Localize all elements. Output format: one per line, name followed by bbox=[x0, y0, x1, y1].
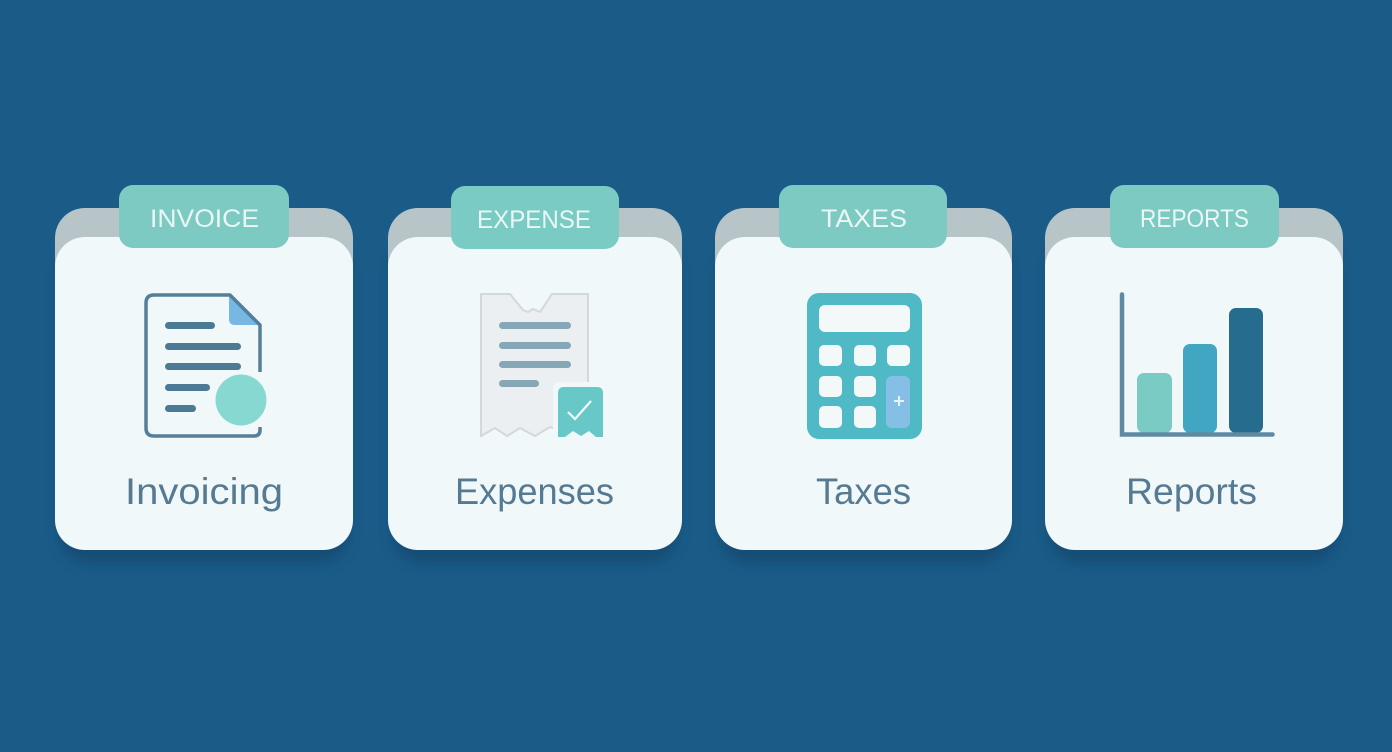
tab: EXPENSE: EXPENSE bbox=[477, 206, 591, 234]
tab: EXPENSE bbox=[451, 186, 619, 249]
icon: receipt with check badge bbox=[481, 294, 607, 440]
tab: TAXES bbox=[779, 185, 947, 248]
icon: calculator bbox=[807, 293, 922, 439]
panel: expenses card bbox=[388, 186, 682, 563]
panel: taxes card bbox=[715, 185, 1012, 563]
label: Expenses: Expenses bbox=[455, 471, 614, 512]
tab: TAXES: TAXES bbox=[821, 205, 907, 233]
label: Reports: Reports bbox=[1126, 471, 1257, 512]
tab: REPORTS bbox=[1110, 185, 1279, 248]
tab: INVOICE: INVOICE bbox=[150, 205, 259, 233]
label: Invoicing: Invoicing bbox=[125, 471, 283, 512]
tab: INVOICE bbox=[119, 185, 289, 248]
icon: invoice document bbox=[146, 295, 266, 436]
label: Taxes: Taxes bbox=[816, 471, 911, 512]
panel: reports card bbox=[1045, 185, 1343, 563]
panel: invoicing card bbox=[55, 185, 353, 563]
tab: REPORTS: REPORTS bbox=[1140, 205, 1249, 233]
icon: bar chart bbox=[1122, 294, 1272, 434]
